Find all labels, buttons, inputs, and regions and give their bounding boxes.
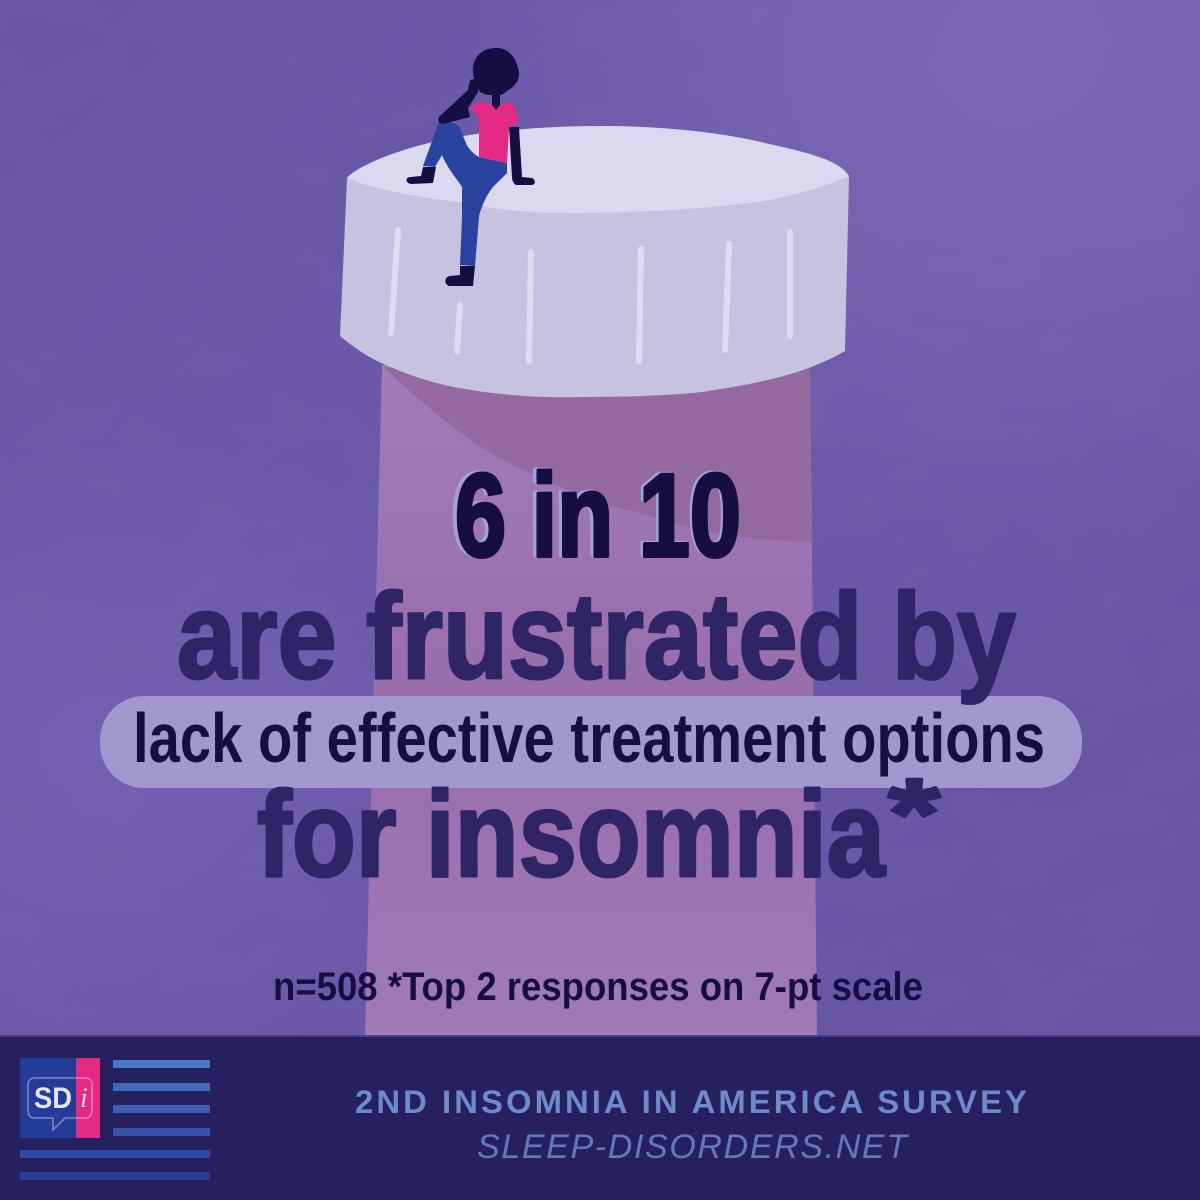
- hair, skin and boots: [406, 48, 535, 286]
- highlight pill: [100, 696, 1082, 788]
- logo: SDi flag: [20, 1058, 100, 1138]
- jeans: [423, 121, 507, 266]
- illustration: pill bottle body: [365, 365, 817, 1036]
- footer website: SLEEP-DISORDERS.NET: [477, 1128, 909, 1166]
- footer band: [0, 1035, 1200, 1200]
- illustration: person sitting on the cap: [406, 48, 535, 286]
- heading: are frustrated by: are frustrated by: [177, 568, 1016, 704]
- logo: SDi flag: SD: [34, 1082, 72, 1115]
- logo: flag stripes: [20, 1060, 210, 1180]
- headline: 6 in 10: 6 in 10: [451, 449, 739, 581]
- logo: SDi flag: i: [80, 1083, 88, 1114]
- footer title: 2ND INSOMNIA IN AMERICA SURVEY: [355, 1084, 1030, 1120]
- heading: for insomnia: *: [888, 758, 940, 870]
- illustration: bottle cap: [340, 126, 849, 397]
- shirt: [470, 101, 518, 163]
- footnote: n=508 *Top 2 responses on 7-pt scale: [273, 965, 923, 1009]
- headline: 6 in 10: 6 in 10: [455, 450, 741, 582]
- heading: for insomnia: for insomnia: [257, 766, 886, 902]
